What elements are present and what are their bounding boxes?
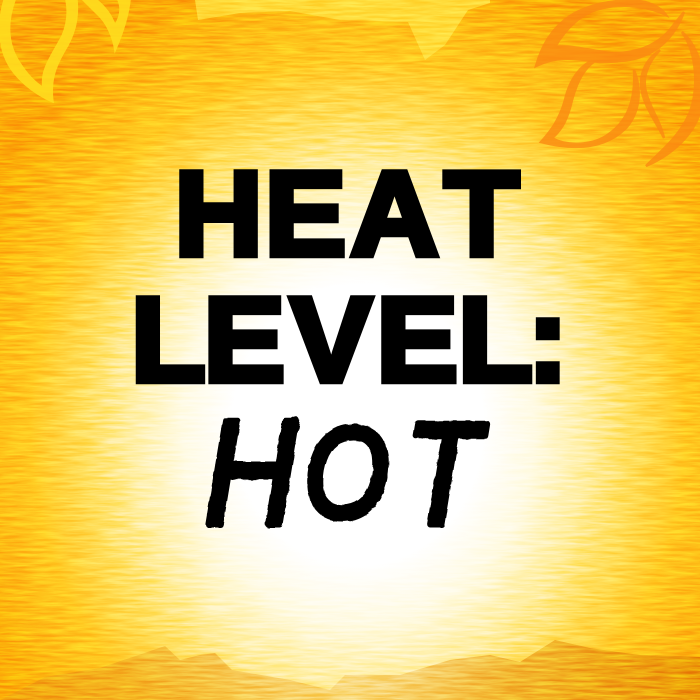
heading: HEAT LEVEL: [131, 146, 568, 407]
brush text: HOT: T [405, 393, 488, 555]
brush text: HOT: O [304, 402, 389, 545]
torn paper: top edge [195, 0, 490, 60]
heading line: LEVEL:: LEVEL: [131, 272, 568, 407]
torn paper: bottom edge [0, 640, 700, 700]
brush text: HOT: H [205, 389, 297, 556]
icon: yellow leaves, top left [0, 0, 130, 102]
icon: orange leaves, top right [536, 1, 700, 166]
heading line: HEAT: HEAT [174, 146, 519, 281]
